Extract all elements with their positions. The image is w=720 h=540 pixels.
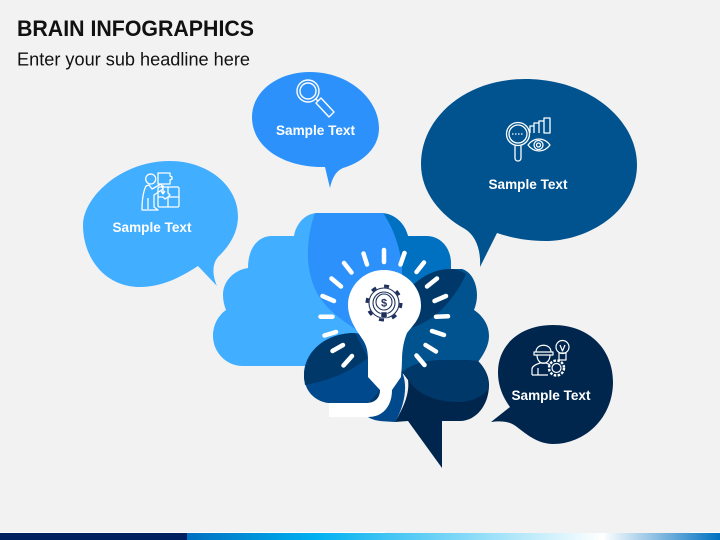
brain upper lobes: [213, 213, 451, 366]
icon: gear with dollar bulb: [367, 286, 401, 320]
brain shape: [200, 200, 489, 468]
label: Sample Text: [112, 219, 192, 235]
footer gradient bar: [0, 532, 720, 540]
icon: engineer, bulb and gear: [532, 340, 569, 376]
brain lower right shade: [402, 360, 488, 402]
subtitle: Enter your sub headline here: [17, 48, 250, 70]
brain lower right speech lobe: [395, 360, 489, 468]
brain lower left lobe: [304, 333, 405, 422]
label: Sample Text: [276, 122, 355, 138]
title: BRAIN INFOGRAPHICS: [17, 16, 254, 41]
icon: gear with dollar bulb: $: [381, 298, 387, 310]
light bulb: [329, 270, 421, 417]
speech bubble: small right: [491, 325, 613, 444]
label: Sample Text: [488, 176, 568, 192]
light rays: [320, 250, 448, 366]
speech bubble: large right: [421, 79, 637, 267]
label: Sample Text: [512, 387, 591, 403]
icon: magnifying glass: [297, 80, 334, 117]
brain right lobe shade: [400, 269, 466, 330]
brain lower left lobe shade: [304, 333, 368, 385]
brain right lobe: [400, 269, 489, 374]
speech bubble: top: [252, 72, 379, 188]
icon: magnifier, bars and eye: [506, 118, 550, 161]
speech bubble: left: [83, 161, 238, 287]
icon: person with puzzle: [142, 173, 179, 210]
